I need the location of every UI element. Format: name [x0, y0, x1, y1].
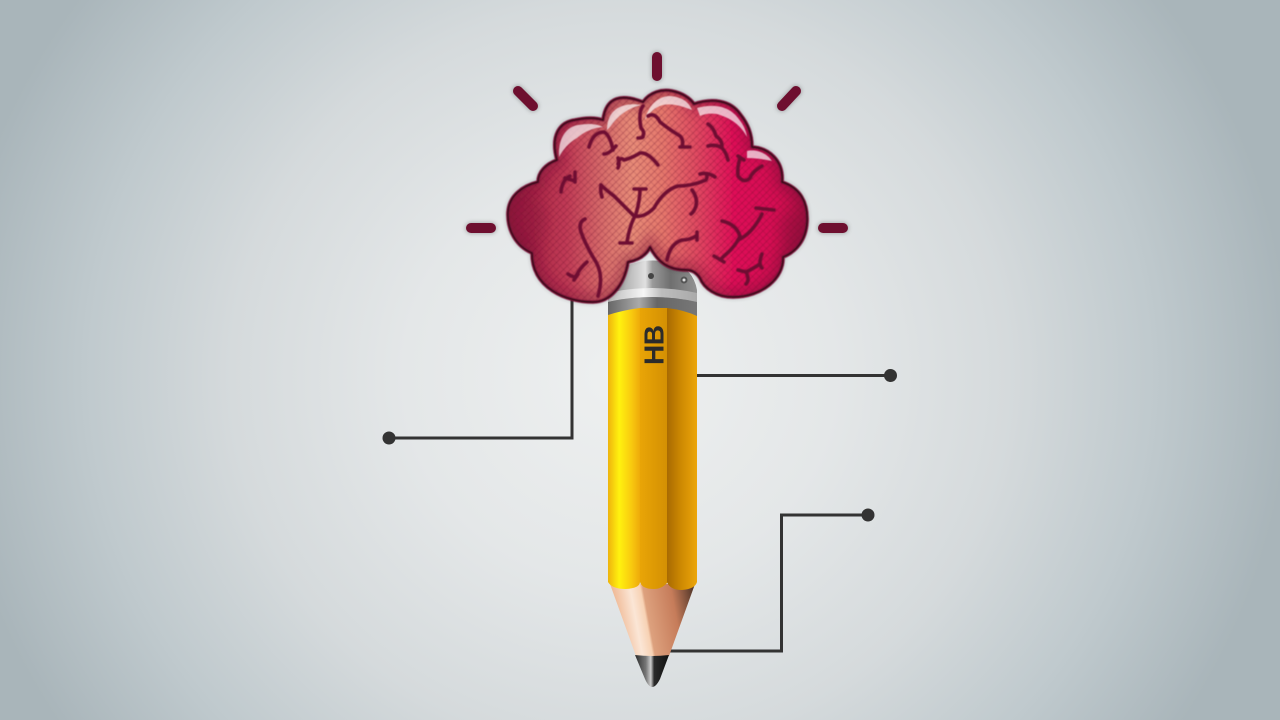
idea rays — [471, 57, 843, 228]
brain highlights — [559, 96, 772, 161]
wood cone — [610, 584, 695, 656]
graphite tip — [635, 655, 669, 687]
brain — [505, 90, 807, 302]
connector: right upper — [697, 369, 897, 382]
connector: left — [382, 300, 572, 444]
pencil grade text: HB — [638, 325, 670, 365]
brain outline and fill — [505, 90, 807, 302]
pencil — [608, 260, 697, 687]
ray: upper left — [518, 91, 533, 106]
connector lines — [382, 300, 897, 651]
ray: left — [471, 223, 491, 233]
ray halo — [471, 57, 843, 228]
ray: upper right — [782, 91, 796, 106]
ferrule — [608, 260, 697, 318]
brain folds — [561, 106, 774, 296]
connector: right lower — [670, 508, 874, 651]
yellow body — [608, 308, 697, 590]
brain shadow — [508, 90, 807, 302]
infographic illustration — [382, 50, 897, 687]
ray: right — [823, 223, 843, 233]
ray: top — [652, 57, 662, 76]
